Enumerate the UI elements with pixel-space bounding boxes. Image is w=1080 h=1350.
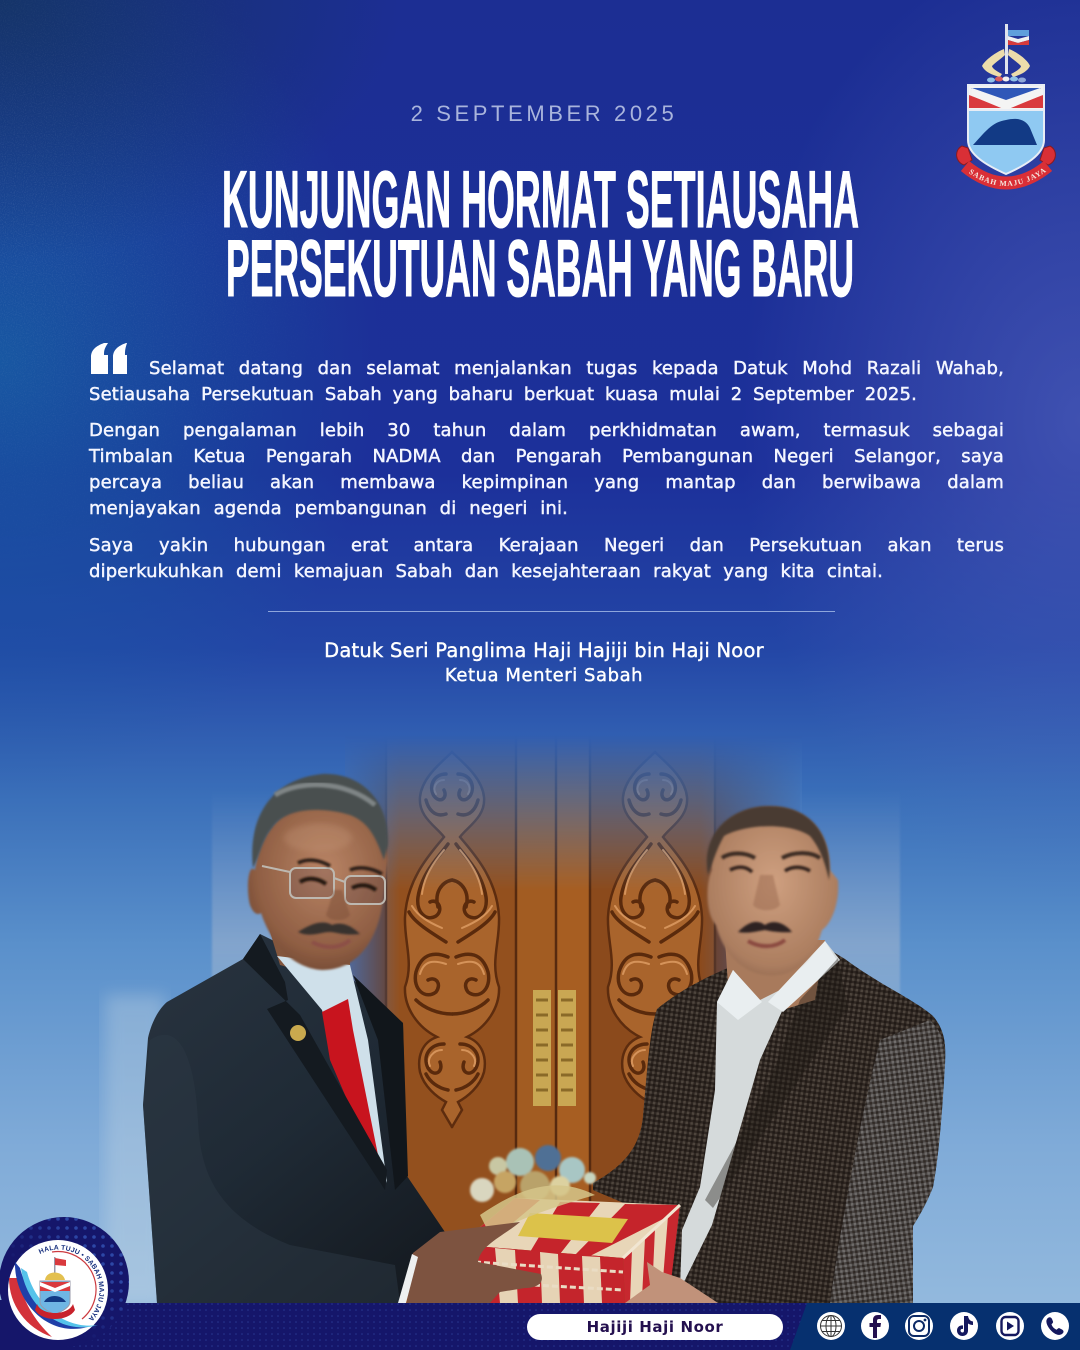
carved ornament left — [405, 752, 499, 1127]
flowers — [470, 1145, 596, 1202]
left man's hand — [407, 1222, 542, 1303]
motto ribbon — [956, 146, 1056, 190]
signatory — [324, 639, 764, 686]
paragraph 1: Setiausaha Persekutuan Sabah yang baharu berkuat kuasa mulai 2 September 2025. — [89, 384, 917, 405]
ribbon — [480, 1185, 595, 1235]
signatory name: Datuk Seri Panglima Haji Hajiji bin Haji Noor — [324, 639, 764, 662]
lapels — [243, 934, 387, 1190]
gold door handles — [533, 990, 576, 1106]
neck — [268, 925, 350, 985]
head — [248, 803, 388, 970]
icon: youtube — [996, 1312, 1024, 1340]
motto ribbon: SABAH MAJU JAYA — [969, 168, 1046, 186]
lapel pin — [290, 1025, 306, 1041]
footer bar with social links — [0, 1217, 1080, 1350]
check jacket — [593, 947, 945, 1303]
glasses — [262, 866, 385, 904]
left man: suit and head — [143, 774, 447, 1303]
icon: tiktok — [950, 1312, 978, 1340]
red tie — [322, 999, 379, 1160]
box sides — [473, 1246, 625, 1303]
divider — [268, 611, 835, 612]
icon: facebook — [861, 1312, 889, 1340]
wall panels behind the door — [105, 790, 900, 1305]
arms and crest — [982, 49, 1030, 82]
coat of arms: Sabah — [956, 24, 1056, 190]
handshake hands on the gift — [398, 1222, 718, 1303]
mini crest — [35, 1257, 75, 1319]
name pill: Hajiji Haji Noor — [587, 1318, 723, 1336]
icon: instagram — [905, 1312, 933, 1340]
hair — [252, 774, 388, 868]
paragraph 2: Dengan pengalaman lebih 30 tahun dalam perkhidmatan awam, termasuk sebagai — [89, 420, 1004, 441]
jacket lapel — [705, 958, 848, 1208]
paragraph 2: percaya beliau akan membawa kepimpinan yang mantap dan berwibawa dalam — [89, 472, 1004, 493]
footer right panel — [790, 1303, 1080, 1350]
blue and red swooshes — [9, 1278, 52, 1337]
carved ornament right — [608, 752, 702, 1127]
face features — [722, 853, 820, 946]
hair — [707, 806, 830, 880]
head — [707, 807, 838, 975]
paragraph 2: menjayakan agenda pembangunan di negeri ini. — [89, 498, 568, 519]
neck — [725, 940, 825, 1020]
carved wooden door — [345, 720, 802, 1310]
paragraph 3: Saya yakin hubungan erat antara Kerajaan Negeri dan Persekutuan akan terus — [89, 535, 1004, 556]
white badge disc — [8, 1240, 108, 1340]
name pill — [527, 1314, 783, 1340]
eyes and moustache — [298, 860, 382, 947]
speckle texture, upper left — [0, 8, 217, 442]
dark jacket — [143, 934, 447, 1303]
signatory role: Ketua Menteri Sabah — [445, 665, 643, 686]
gift box with flowers — [467, 1145, 680, 1303]
badge: Hala Tuju Sabah Maju Jaya: HALA TUJU • SABAH MAJU JAYA — [38, 1244, 104, 1320]
shield — [968, 85, 1044, 174]
date line: 2 SEPTEMBER 2025 — [411, 101, 677, 126]
paragraph 2: Timbalan Ketua Pengarah NADMA dan Pengarah Pembangunan Negeri Selangor, saya — [89, 446, 1004, 467]
right man: suit and head — [593, 806, 945, 1303]
white shirt — [680, 941, 840, 1290]
paragraph 3: diperkukuhkan demi kemajuan Sabah dan kesejahteraan rakyat yang kita cintai. — [89, 561, 883, 582]
right man's hand — [625, 1262, 718, 1303]
paragraph 1 — [89, 358, 1004, 405]
white shirt cuff — [398, 1254, 418, 1303]
icon: phone — [1041, 1312, 1069, 1340]
shirt — [277, 956, 387, 1183]
flag and pole — [1005, 24, 1029, 74]
paragraph 1: Selamat datang dan selamat menjalankan tugas kepada Datuk Mohd Razali Wahab, — [149, 358, 1004, 379]
footer background — [0, 1303, 810, 1350]
paragraph 2 — [88, 420, 1004, 519]
title — [222, 155, 859, 314]
icon: website — [817, 1312, 845, 1340]
badge ring text and arc — [52, 1252, 96, 1319]
quote mark — [91, 343, 127, 374]
box top — [467, 1198, 680, 1258]
badge: Hala Tuju Sabah Maju Jaya — [0, 1217, 129, 1347]
paragraph 3 — [89, 535, 1004, 582]
